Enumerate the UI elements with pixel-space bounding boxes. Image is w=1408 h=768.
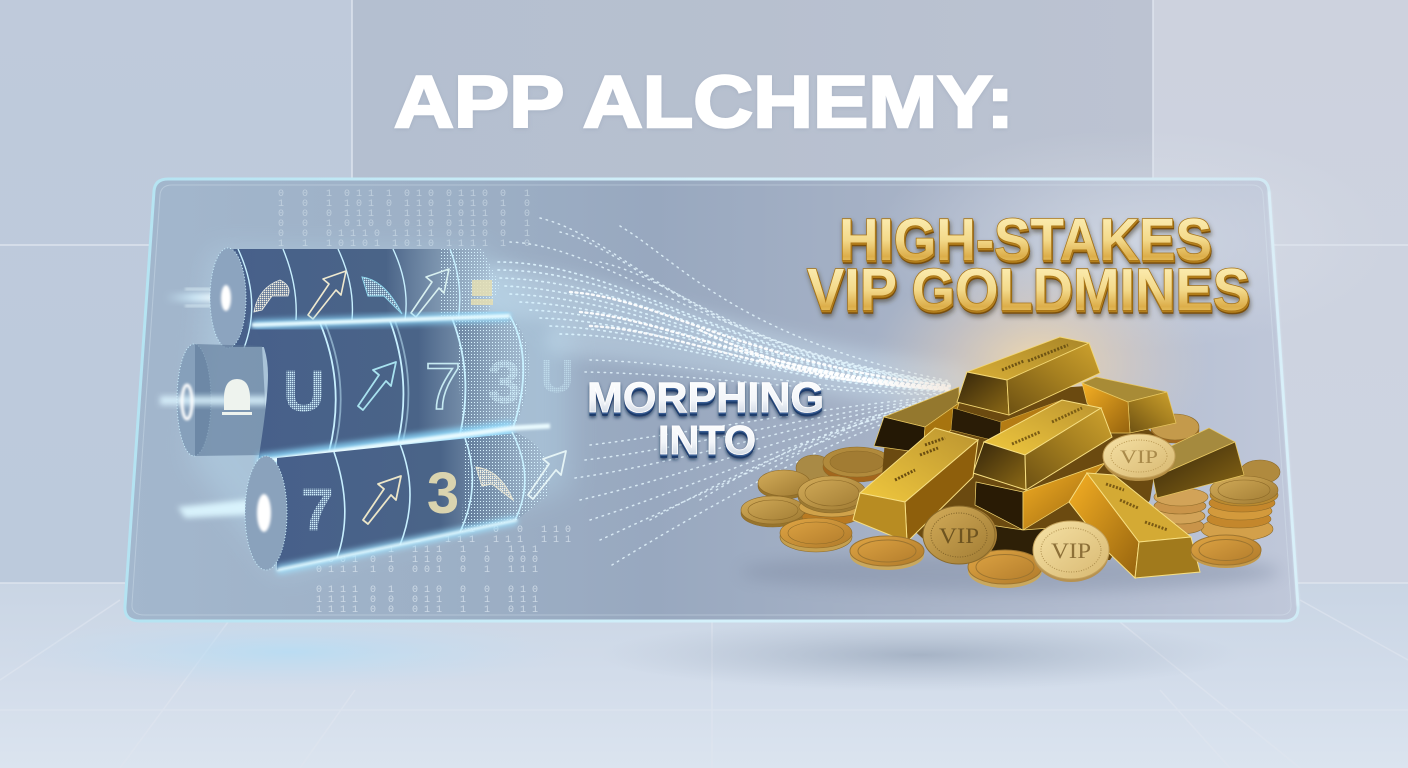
- binary code bottom: 0 1 1 1 1 0 0 0 1 0 1 1 1 1: [316, 565, 538, 576]
- binary code bottom: 1 1 1 1 0 0 0 1 1 1 1 1 1 1: [316, 595, 538, 606]
- heading: high-stakes vip goldmines: HIGH-STAKES: [839, 207, 1212, 273]
- morphing label: [587, 374, 824, 463]
- binary code top: 1 1 1 0 1 0 1 1 0 1 0 1 1 1 1 1 0: [278, 239, 530, 250]
- binary code top: [278, 189, 530, 250]
- pile core filler: [880, 385, 1160, 560]
- symbol: three: 3: [427, 461, 459, 526]
- coin: vip standing gold: [923, 506, 997, 564]
- binary code bottom: 1 1 1 1 0 1 1 1 1 1 1 1 1 1: [316, 545, 538, 556]
- binary code bottom: 1 0 0 1 0 1 1 1 0 0 0 0 0 0: [316, 555, 538, 566]
- symbol: ghost U: U: [540, 350, 574, 402]
- coin: vip standing gold: VIP: [939, 523, 979, 548]
- slot reel: bottom row: [178, 432, 566, 570]
- coins: back right: [1151, 414, 1280, 541]
- symbol: arrow: [308, 271, 346, 319]
- gold bar: right front: [1069, 473, 1200, 578]
- coin: vip pale upper: [1103, 434, 1175, 481]
- symbol: lock: [222, 379, 252, 415]
- symbol: arrow: [358, 362, 396, 410]
- binary code top: 0 0 1 0 1 1 1 0 1 0 0 1 1 0 0 1: [278, 189, 530, 200]
- symbol: curved blade: [476, 467, 513, 500]
- gold bar: left tilted: [853, 428, 978, 542]
- gold pile: bars and VIP coins: [740, 337, 1280, 592]
- data particle stream: [498, 218, 950, 565]
- binary code bottom: 1 1 1 1 0 0 0 1 1 1 1 0 1 1: [316, 605, 538, 616]
- gold bar: top: [957, 337, 1100, 415]
- pile shadow: [740, 552, 1280, 592]
- gold bar: right back: [1153, 428, 1244, 498]
- gold bar: lower center: [975, 463, 1105, 560]
- reels glow: [190, 250, 570, 575]
- gold bar: center: [973, 400, 1112, 490]
- heading: high-stakes vip goldmines: [807, 207, 1250, 323]
- heading: high-stakes vip goldmines: VIP GOLDMINES: [807, 257, 1250, 323]
- gold bar: back left: [874, 387, 959, 453]
- warm glow behind gold: [870, 250, 1210, 480]
- coin: front small right: [1191, 535, 1261, 568]
- symbol: three: 3: [487, 349, 521, 416]
- binary code bottom: 0 1 0 1 0 1 0 0 1 1 0: [391, 525, 571, 536]
- symbol: seven: 7: [300, 476, 334, 543]
- binary code top: 1 0 1 1 0 1 0 1 1 0 1 0 1 0 1 0: [278, 199, 530, 210]
- symbol: coded block: [471, 280, 493, 305]
- slot reel: middle row: [160, 316, 574, 462]
- symbol: arrow: [411, 269, 449, 317]
- symbol: arrow: [363, 476, 401, 524]
- coin: vip standing pale: [1033, 521, 1109, 582]
- binary code top: 0 0 1 0 1 0 0 0 1 0 0 1 1 0 0 1: [278, 219, 530, 230]
- symbol: seven: 7: [425, 349, 461, 423]
- binary code bottom: [316, 525, 571, 616]
- symbol: arrow: [528, 451, 566, 499]
- binary code top: 0 0 0 1 1 1 1 1 1 1 1 0 1 1 0 0: [278, 209, 530, 220]
- coin: vip pale upper: VIP: [1120, 447, 1158, 468]
- symbol: curved blade: [362, 277, 402, 314]
- coins: back left: [741, 447, 891, 552]
- gold bar: under top: [951, 400, 1062, 442]
- coin: vip standing pale: VIP: [1051, 538, 1091, 563]
- coin: front middle flat: [968, 550, 1042, 588]
- gold bar: back right: [1082, 377, 1176, 433]
- morphing label: INTO: [658, 417, 756, 463]
- binary code bottom: 0 1 1 1 0 1 0 1 0 0 0 0 1 0: [316, 585, 538, 596]
- symbol: umbrella: [254, 280, 289, 312]
- morphing label: MORPHING: [587, 374, 824, 422]
- binary code bottom: 1 1 1 1 1 1 1 1 1 1 1 1: [391, 535, 571, 546]
- coin: front left flat: [850, 536, 924, 570]
- symbol: U: U: [283, 359, 325, 424]
- slot reel: top row: [165, 248, 500, 348]
- binary code top: 0 0 0 1 1 1 0 1 1 1 1 0 0 1 0 0 1: [278, 229, 530, 240]
- title: APP ALCHEMY:: [394, 62, 1014, 143]
- glass panel: [125, 130, 1390, 621]
